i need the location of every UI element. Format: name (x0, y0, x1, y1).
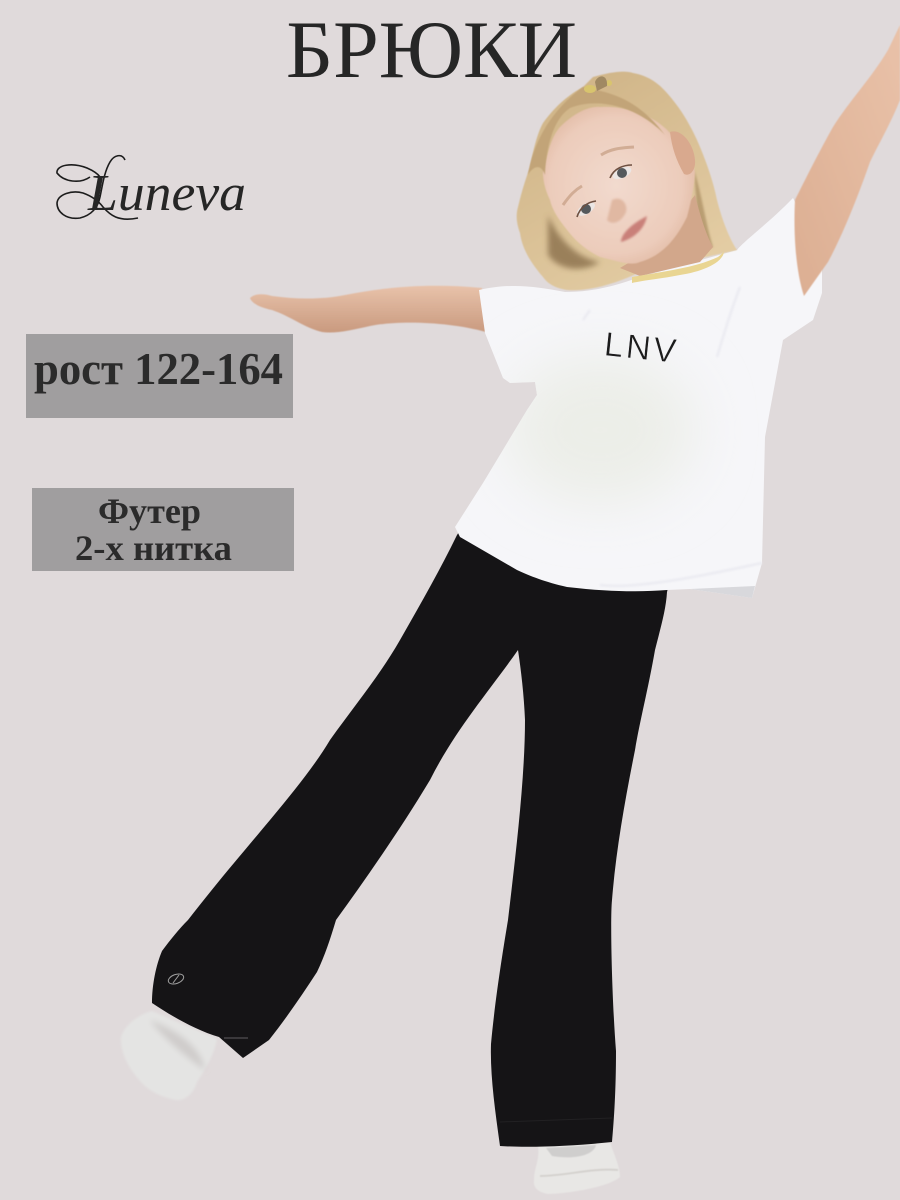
shirt logo LNV: LNV (602, 325, 678, 371)
nose (607, 199, 626, 223)
eyes (563, 147, 634, 219)
badge: fabric: Футер (98, 491, 201, 531)
pants hardware: small logo (167, 972, 185, 986)
neck (620, 195, 713, 276)
pants (152, 500, 680, 1147)
hair shadow right (694, 170, 713, 250)
hair back (517, 72, 737, 290)
badge: fabric (32, 488, 294, 571)
logo: Luneva (57, 156, 246, 222)
left shoe (121, 1011, 217, 1100)
badge: height range: рост 122-164 (34, 343, 283, 394)
badge: fabric: 2-х нитка (75, 528, 232, 568)
pants seam (500, 1118, 612, 1122)
hair ties (584, 76, 612, 93)
face (543, 107, 695, 264)
thread highlight (224, 1037, 248, 1039)
collar (632, 252, 724, 283)
front hair strands (528, 87, 665, 175)
logo: Luneva: Luneva (87, 165, 246, 222)
mouth (621, 216, 647, 242)
shirt folds (583, 287, 762, 586)
outstretched arm (250, 286, 486, 333)
right shoe (534, 1142, 620, 1194)
ear (670, 131, 695, 175)
shirt hem tail (690, 586, 755, 598)
hair shadow (548, 215, 600, 269)
raised arm (794, 25, 900, 296)
shirt shading (505, 355, 695, 505)
t-shirt (455, 198, 822, 598)
badge: height range (26, 334, 293, 418)
title: БРЮКИ (286, 4, 577, 95)
